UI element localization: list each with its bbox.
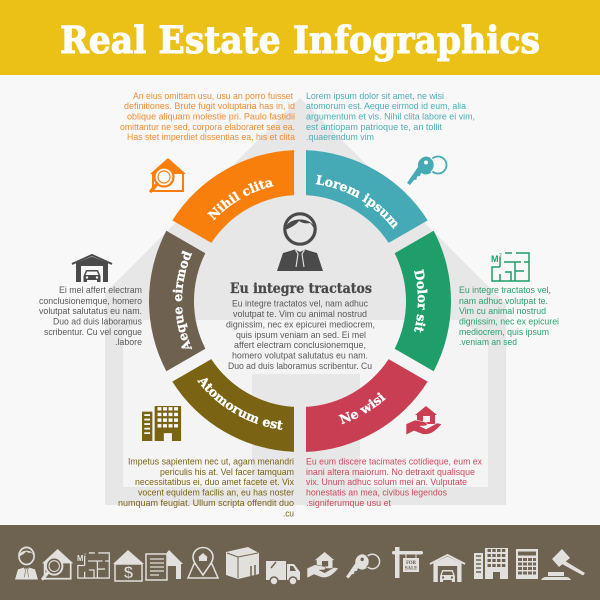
text block: green: nam adhuc volutpat te.	[459, 296, 548, 307]
icon: calculator	[516, 549, 538, 579]
icon: garage	[430, 555, 465, 582]
text block: teal: argumentum et vis. Nihil clita labore ei vim,	[306, 112, 475, 122]
icon: person	[15, 547, 38, 579]
center heading: Eu integre tractatos	[230, 281, 372, 297]
text block: teal: est antiopam patrioque te, an tollit	[306, 122, 442, 133]
icon: dollar house	[113, 550, 144, 582]
icon: gavel	[541, 549, 585, 580]
segment: Nihil clita	[172, 150, 294, 243]
text block: left grey	[39, 285, 142, 348]
text block: red: honestatis an mea, civibus legendos	[306, 488, 447, 498]
icon: truck	[266, 561, 300, 585]
center text block: dignissim, nec ex epicurei mediocrem,	[226, 320, 375, 330]
text block: left grey: Ei mel affert electram	[59, 285, 142, 296]
text block: red: vix. Unum adhuc solum mei an. Vulputate	[306, 477, 467, 488]
text block: green: mediocrem, quis ipsum	[459, 327, 549, 338]
text block: green: Vim cu animal nostrud	[459, 306, 546, 317]
text block: green	[459, 285, 559, 348]
footer icons	[15, 547, 585, 585]
segment: Atomorum est: Atomorum est	[197, 378, 283, 430]
icon: building	[474, 548, 508, 579]
segment: Dolor sit: Dolor sit	[414, 269, 428, 332]
segment: Aeque eirmod: Aeque eirmod	[172, 250, 192, 350]
text block: olive: .cu	[283, 508, 294, 520]
text block: orange	[120, 91, 296, 143]
center text block: volutpat te. Vim cu animal nostrud	[233, 309, 367, 320]
icon: key	[346, 554, 380, 578]
icon: key	[407, 156, 446, 185]
center text block: affert electram conclusionemque,	[234, 340, 366, 351]
text block: olive: periculis his at. Vel facer tamquam	[160, 467, 294, 478]
text block: green: .veniam an sed	[459, 337, 517, 348]
text block: red	[306, 456, 482, 509]
segment: Nihil clita: Nihil clita	[207, 180, 274, 221]
segment: Atomorum est	[172, 359, 294, 452]
segment: Aeque eirmod	[149, 230, 206, 372]
footer bar	[0, 525, 600, 600]
title: Real Estate Infographics	[60, 18, 540, 62]
text block: teal: .quaerendum vim	[306, 132, 374, 143]
text block: orange: An eius omittam usu, usu an porro fuisset	[133, 91, 293, 102]
text block: olive: numquam feugiat. Ullum scripta offendit duo	[118, 498, 294, 509]
text block: left grey: conclusionemque, homero	[39, 296, 142, 307]
text block: orange: omittantur ne sed, corpora elaboraret sea ea.	[120, 122, 295, 133]
text block: teal	[306, 91, 475, 143]
icon: search house	[42, 549, 73, 579]
text block: teal: atomorum est. Aeque eirmod id eum, alia	[306, 101, 467, 112]
text block: red: .signiferumque usu et	[306, 498, 391, 509]
segment: Ne wisi	[306, 359, 428, 452]
icon: hand with house	[406, 406, 442, 435]
text block: orange: oblique aliquam molestie pri. Paulo fastidii	[127, 112, 295, 122]
icon: building	[142, 406, 181, 441]
text block: olive	[118, 456, 294, 520]
background house silhouette	[105, 98, 506, 505]
center text block: Duo ad duis laboramus scribentur. Cu	[228, 361, 372, 372]
icon: floor plan	[491, 253, 529, 281]
icon: garage	[72, 255, 112, 282]
text block: olive: necessitatibus ei, duo amet facete et. Vix	[135, 477, 294, 488]
icon: hand	[307, 552, 339, 578]
center text block: Eu integre tractatos vel, nam adhuc	[232, 298, 368, 310]
text block: green: Eu integre tractatos vel,	[459, 285, 551, 296]
segment: Lorem ipsum	[306, 150, 428, 243]
icon: map pin	[188, 548, 218, 578]
icon: plan	[77, 552, 109, 578]
text block: green: dignissim, nec ex epicurei	[459, 316, 559, 328]
text block: orange: definitiones. Brute fugit voluptaria has in, id	[124, 101, 295, 112]
segment: Lorem ipsum: Lorem ipsum	[316, 174, 398, 230]
icon: for sale	[392, 547, 423, 578]
text block: left grey: .labore	[115, 337, 142, 348]
segment: Ne wisi: Ne wisi	[338, 392, 386, 424]
text block: red: inani altera maiorum. No detraxit qualisque	[306, 467, 475, 478]
center text block: quis ipsum veniam an sed. Ei mel	[236, 330, 366, 341]
text block: olive: vocent equidem facilis an, eu has noster	[138, 488, 294, 498]
center text block: homero volutpat salutatus eu nam.	[232, 350, 368, 362]
icon: box	[226, 547, 259, 579]
segment: Dolor sit	[394, 230, 451, 372]
text block: red: Eu eum discere tacimates cotidieque, eum ex	[306, 456, 482, 468]
text block: left grey: scribentur. Cu vel congue	[44, 327, 142, 338]
icon: house search	[150, 158, 186, 191]
text block: teal: Lorem ipsum dolor sit amet, ne wisi	[306, 91, 444, 102]
text block: left grey: volutpat salutatus eu nam.	[39, 306, 142, 317]
icon: center person	[277, 214, 323, 271]
title banner	[0, 0, 600, 75]
icon: doc house	[146, 550, 183, 580]
text block: left grey: Duo ad duis laboramus	[53, 316, 142, 328]
center text block	[226, 298, 375, 372]
text block: olive: Impetus sapientem nec ut, agam menandri	[128, 456, 294, 468]
text block: orange: Has stet imperdiet dissentias ea, his et clita	[127, 132, 296, 143]
